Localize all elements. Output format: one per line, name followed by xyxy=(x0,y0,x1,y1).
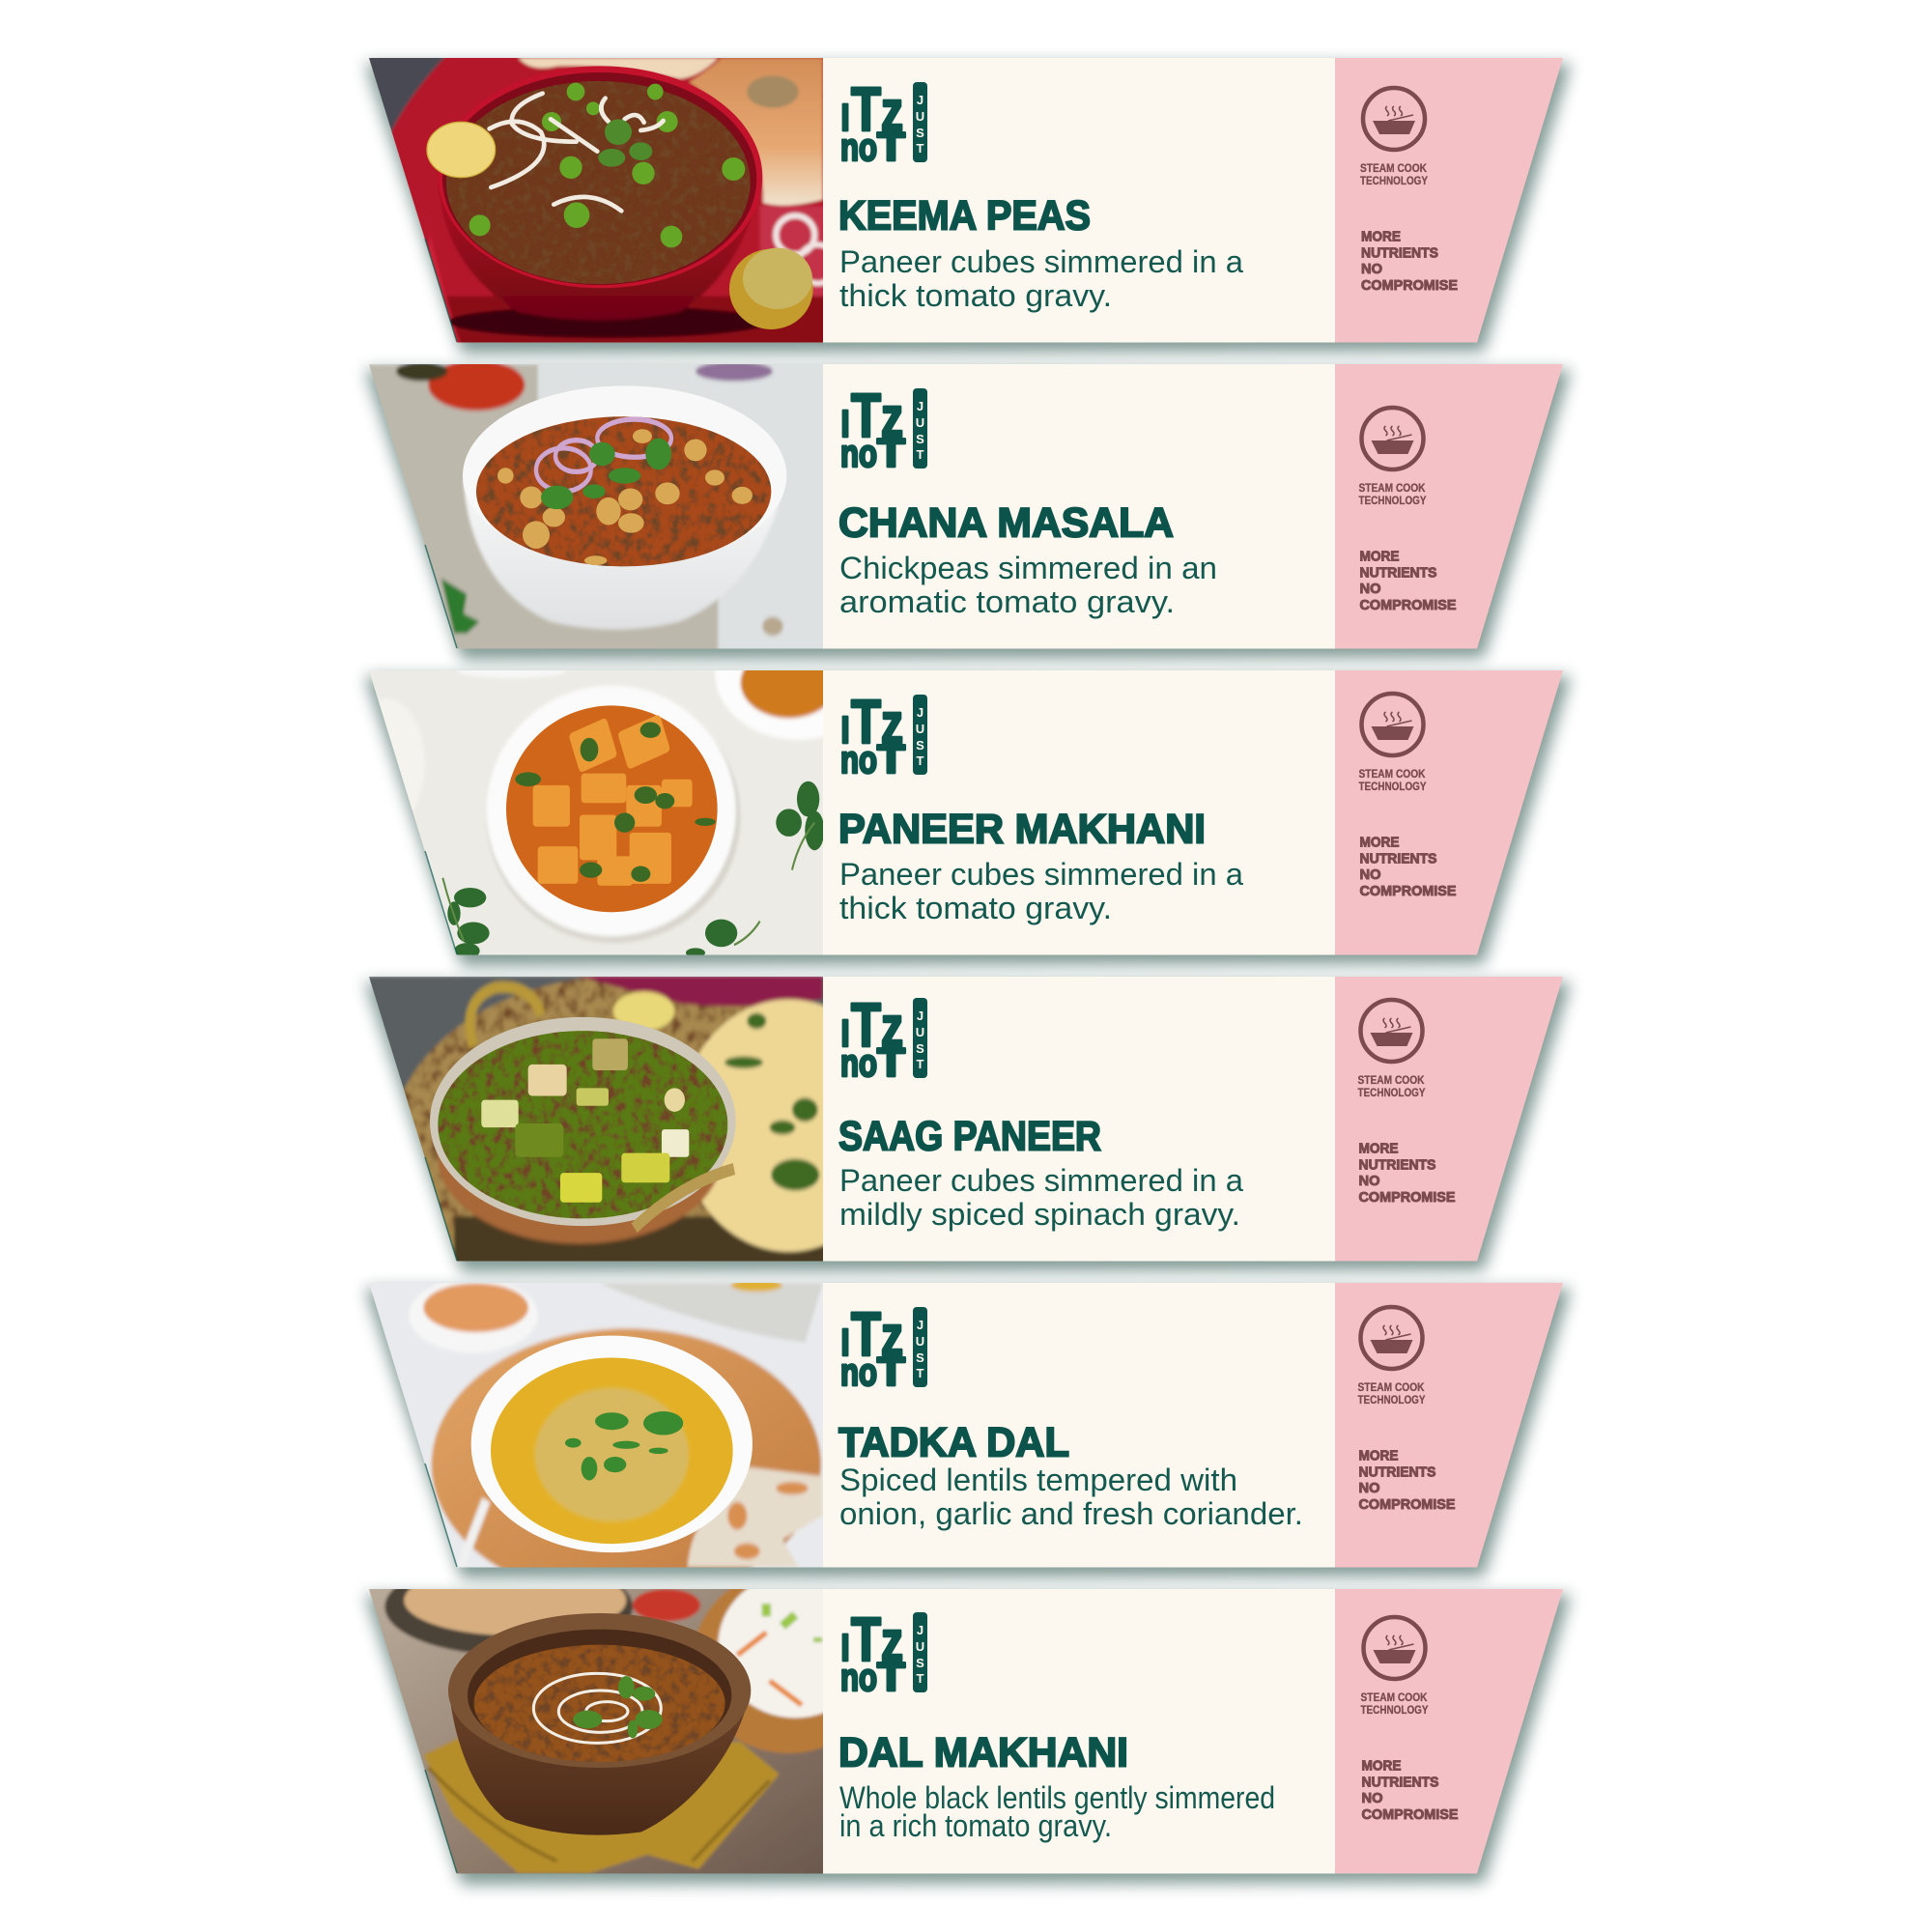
logo: iTz noT JUST: T xyxy=(917,1366,924,1380)
logo: iTz noT JUST: T xyxy=(877,1654,905,1699)
claims: steam cook icon and text xyxy=(1360,88,1458,294)
panel: dal makhani xyxy=(357,1558,1571,1893)
cream label panel xyxy=(823,977,1335,1262)
claims: steam cook icon and text: TECHNOLOGY xyxy=(1358,496,1427,507)
description: aromatic tomato gravy. xyxy=(839,584,1175,619)
cream label panel xyxy=(823,1283,1335,1567)
logo: iTz noT JUST: U xyxy=(916,722,924,736)
photo: chana masala xyxy=(369,364,823,649)
logo: iTz noT JUST xyxy=(840,1299,927,1394)
logo: iTz noT JUST: T xyxy=(851,990,881,1060)
pink claims strip xyxy=(1335,1589,1563,1874)
logo: iTz noT JUST: ı xyxy=(840,1311,850,1366)
claims: steam cook icon and text: NO xyxy=(1360,867,1381,883)
logo: iTz noT JUST: U xyxy=(916,109,924,124)
logo: iTz noT JUST: T xyxy=(877,1349,905,1394)
claims: steam cook icon and text: NO xyxy=(1362,1790,1383,1806)
logo: iTz noT JUST: ı xyxy=(840,1616,850,1671)
logo: iTz noT JUST: no xyxy=(840,127,877,169)
cream label panel xyxy=(823,1589,1335,1874)
logo: iTz noT JUST xyxy=(840,1605,927,1699)
title: SAAG PANEER xyxy=(838,1113,1101,1159)
logo: iTz noT JUST: T xyxy=(917,141,924,156)
claims: steam cook icon and text: NUTRIENTS xyxy=(1358,1464,1435,1480)
logo: iTz noT JUST: T xyxy=(917,1057,924,1071)
claims: steam cook icon and text: NUTRIENTS xyxy=(1360,564,1437,582)
logo: iTz noT JUST: U xyxy=(916,1639,924,1654)
claims: steam cook icon and text: NO xyxy=(1361,261,1382,277)
logo: iTz noT JUST: T xyxy=(877,736,905,781)
logo: iTz noT JUST: T xyxy=(917,1671,924,1686)
logo: iTz noT JUST: J xyxy=(917,93,923,107)
claims: steam cook icon and text: STEAM COOK xyxy=(1358,1382,1425,1394)
claims: steam cook icon and text: NUTRIENTS xyxy=(1361,245,1438,261)
claims: steam cook icon and text: TECHNOLOGY xyxy=(1358,1395,1426,1406)
claims: steam cook icon and text xyxy=(1358,1000,1455,1206)
pink claims strip xyxy=(1335,670,1563,954)
panel: chana masala xyxy=(357,357,1571,660)
pink claims strip xyxy=(1335,58,1563,342)
logo: iTz noT JUST: z xyxy=(881,386,903,449)
logo: iTz noT JUST xyxy=(840,687,927,781)
logo: iTz noT JUST: ı xyxy=(840,698,850,753)
logo: iTz noT JUST: T xyxy=(877,124,905,169)
claims: steam cook icon and text: STEAM COOK xyxy=(1360,1692,1428,1704)
claims: steam cook icon and text: TECHNOLOGY xyxy=(1358,781,1427,793)
panel: paneer makhani xyxy=(357,665,1578,977)
logo: iTz noT JUST: J xyxy=(917,705,923,720)
claims: steam cook icon and text xyxy=(1358,408,1457,613)
claims: steam cook icon and text: NUTRIENTS xyxy=(1360,850,1437,867)
logo: iTz noT JUST: no xyxy=(840,1657,877,1699)
cream label panel xyxy=(823,670,1335,954)
claims: steam cook icon and text: COMPROMISE xyxy=(1358,1496,1455,1513)
logo: iTz noT JUST: no xyxy=(840,1351,877,1394)
logo: iTz noT JUST: z xyxy=(881,1305,903,1368)
claims: steam cook icon and text: STEAM COOK xyxy=(1358,483,1426,495)
claims: steam cook icon and text: TECHNOLOGY xyxy=(1360,1705,1429,1717)
description: Paneer cubes simmered in a xyxy=(839,1163,1243,1198)
logo: iTz noT JUST: T xyxy=(917,753,924,768)
logo: iTz noT JUST: T xyxy=(917,447,924,462)
description: thick tomato gravy. xyxy=(839,891,1112,925)
logo: iTz noT JUST: J xyxy=(917,1623,923,1637)
logo: iTz noT JUST: U xyxy=(916,1025,924,1039)
claims: steam cook icon and text: MORE xyxy=(1360,549,1399,564)
pink claims strip xyxy=(1335,1283,1563,1567)
claims: steam cook icon and text: TECHNOLOGY xyxy=(1360,176,1428,187)
logo: iTz noT JUST: J xyxy=(917,1009,923,1023)
logo: iTz noT JUST: no xyxy=(840,739,877,781)
logo: iTz noT JUST: z xyxy=(881,1610,903,1673)
logo: iTz noT JUST: ı xyxy=(840,86,850,141)
claims: steam cook icon and text: NO xyxy=(1358,1480,1380,1496)
logo: iTz noT JUST: z xyxy=(881,80,903,143)
description: thick tomato gravy. xyxy=(839,278,1112,313)
title: TADKA DAL xyxy=(838,1420,1069,1466)
logo: iTz noT JUST xyxy=(840,74,927,169)
description: Chickpeas simmered in an xyxy=(839,551,1217,585)
claims: steam cook icon and text: MORE xyxy=(1360,835,1399,850)
logo: iTz noT JUST: U xyxy=(916,415,924,430)
logo: iTz noT JUST: no xyxy=(840,1042,877,1085)
description: Whole black lentils gently simmered xyxy=(839,1780,1275,1815)
logo: iTz noT JUST: U xyxy=(916,1334,924,1349)
claims: steam cook icon and text: COMPROMISE xyxy=(1360,883,1457,899)
photo: keema peas xyxy=(369,58,823,342)
logo: iTz noT JUST: no xyxy=(840,433,877,475)
claims: steam cook icon and text: COMPROMISE xyxy=(1360,597,1457,613)
logo: iTz noT JUST: S xyxy=(916,126,924,140)
claims: steam cook icon and text: COMPROMISE xyxy=(1362,1806,1459,1823)
description: mildly spiced spinach gravy. xyxy=(839,1197,1240,1232)
claims: steam cook icon and text: TECHNOLOGY xyxy=(1358,1088,1426,1099)
title: PANEER MAKHANI xyxy=(838,806,1206,852)
logo: iTz noT JUST: S xyxy=(916,432,924,446)
claims: steam cook icon and text: STEAM COOK xyxy=(1358,1075,1425,1087)
claims: steam cook icon and text: NO xyxy=(1358,1173,1380,1189)
logo: iTz noT JUST: S xyxy=(916,1350,924,1365)
logo: iTz noT JUST: ı xyxy=(840,392,850,447)
claims: steam cook icon and text: STEAM COOK xyxy=(1360,163,1428,175)
logo: iTz noT JUST: J xyxy=(917,399,923,413)
logo: iTz noT JUST: T xyxy=(877,1039,905,1085)
title: CHANA MASALA xyxy=(838,500,1174,547)
logo: iTz noT JUST: J xyxy=(917,1318,923,1332)
panel: saag paneer xyxy=(357,976,1571,1322)
photo: paneer makhani xyxy=(369,670,823,954)
logo: iTz noT JUST: S xyxy=(916,1041,924,1056)
title: KEEMA PEAS xyxy=(838,193,1091,240)
logo: iTz noT JUST: S xyxy=(916,738,924,753)
claims: steam cook icon and text: NUTRIENTS xyxy=(1362,1774,1439,1791)
claims: steam cook icon and text xyxy=(1358,694,1457,899)
logo: iTz noT JUST: z xyxy=(881,693,903,755)
logo: iTz noT JUST: S xyxy=(916,1656,924,1670)
logo: iTz noT JUST: T xyxy=(851,74,881,144)
logo: iTz noT JUST: T xyxy=(851,381,881,450)
description: Paneer cubes simmered in a xyxy=(839,857,1243,892)
cream label panel xyxy=(823,58,1335,342)
title: DAL MAKHANI xyxy=(838,1729,1128,1776)
cream label panel xyxy=(823,364,1335,649)
claims: steam cook icon and text xyxy=(1360,1617,1459,1823)
claims: steam cook icon and text: STEAM COOK xyxy=(1358,769,1426,781)
panel: tadka dal xyxy=(357,1278,1571,1601)
claims: steam cook icon and text: COMPROMISE xyxy=(1358,1189,1455,1206)
photo: tadka dal xyxy=(370,1283,823,1567)
panel: keema peas xyxy=(357,39,1571,367)
claims: steam cook icon and text: MORE xyxy=(1358,1447,1399,1464)
logo: iTz noT JUST: T xyxy=(851,687,881,756)
description: Paneer cubes simmered in a xyxy=(839,244,1243,279)
claims: steam cook icon and text: MORE xyxy=(1358,1140,1399,1157)
logo: iTz noT JUST: T xyxy=(851,1299,881,1369)
logo: iTz noT JUST xyxy=(840,381,927,475)
claims: steam cook icon and text xyxy=(1358,1307,1455,1513)
logo: iTz noT JUST: T xyxy=(851,1605,881,1674)
logo: iTz noT JUST: ı xyxy=(840,1002,850,1057)
pink claims strip xyxy=(1335,364,1563,649)
logo: iTz noT JUST: T xyxy=(877,430,905,475)
description: onion, garlic and fresh coriander. xyxy=(839,1496,1303,1531)
claims: steam cook icon and text: NO xyxy=(1360,581,1381,597)
photo: dal makhani xyxy=(369,1589,823,1874)
claims: steam cook icon and text: MORE xyxy=(1362,1758,1401,1774)
pink claims strip xyxy=(1335,977,1563,1262)
claims: steam cook icon and text: NUTRIENTS xyxy=(1358,1157,1435,1173)
claims: steam cook icon and text: COMPROMISE xyxy=(1361,277,1458,294)
description: in a rich tomato gravy. xyxy=(839,1808,1112,1843)
logo: iTz noT JUST xyxy=(840,990,927,1085)
claims: steam cook icon and text: MORE xyxy=(1361,228,1401,245)
photo: saag paneer xyxy=(369,977,823,1262)
description: Spiced lentils tempered with xyxy=(839,1463,1237,1497)
logo: iTz noT JUST: z xyxy=(881,996,903,1059)
